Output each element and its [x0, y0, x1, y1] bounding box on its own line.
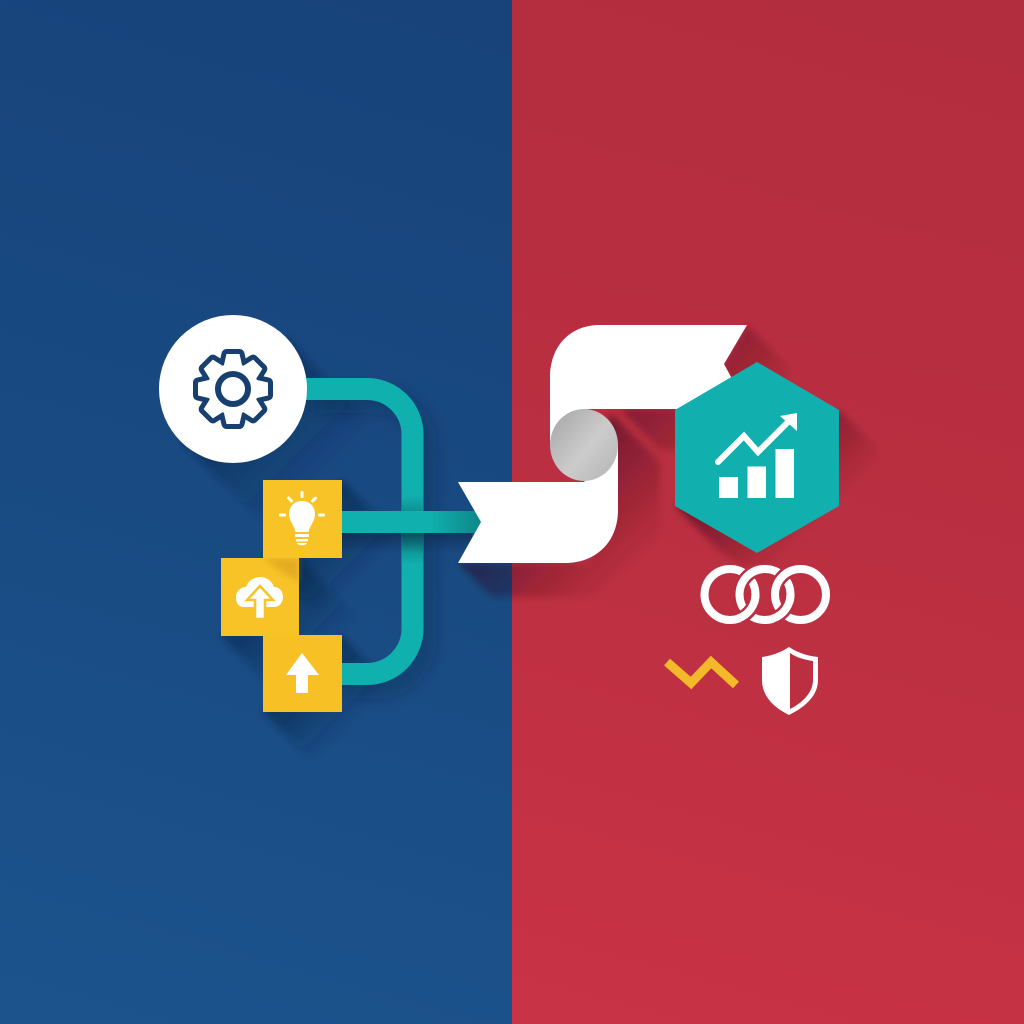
ribbon: top band	[550, 325, 747, 445]
ribbon shadows	[458, 325, 790, 597]
hexagon: growth chart	[675, 362, 839, 553]
yellow square: light bulb	[263, 480, 342, 558]
square shadow on neighbour	[263, 558, 299, 583]
icon: light bulb	[279, 491, 325, 545]
connector shadow	[319, 401, 424, 686]
icon: bar chart with rising arrow	[718, 413, 797, 498]
yellow square: cloud upload	[221, 558, 299, 636]
yellow square: up arrow	[263, 635, 342, 712]
panel: red right background	[512, 0, 1024, 1024]
panel: blue left background	[0, 0, 512, 1024]
long shadows: left side	[181, 337, 402, 762]
connector: teal bracket line	[300, 389, 412, 674]
circle: gear badge	[159, 315, 307, 463]
shadow under horizontal line	[342, 533, 472, 553]
icon: interlocked chain rings	[704, 559, 836, 630]
icon: cloud upload	[236, 577, 283, 619]
icon: gear	[198, 354, 268, 424]
ribbon: bottom band	[458, 445, 618, 563]
ribbon: grey fold	[550, 409, 618, 481]
hexagon shadow	[675, 410, 885, 599]
icon: yellow zigzag	[667, 662, 736, 685]
icon: up arrow	[286, 653, 319, 693]
connector: teal horizontal arrow line	[335, 511, 485, 533]
connector shading at crossing	[402, 495, 423, 565]
icon: shield	[762, 647, 818, 715]
